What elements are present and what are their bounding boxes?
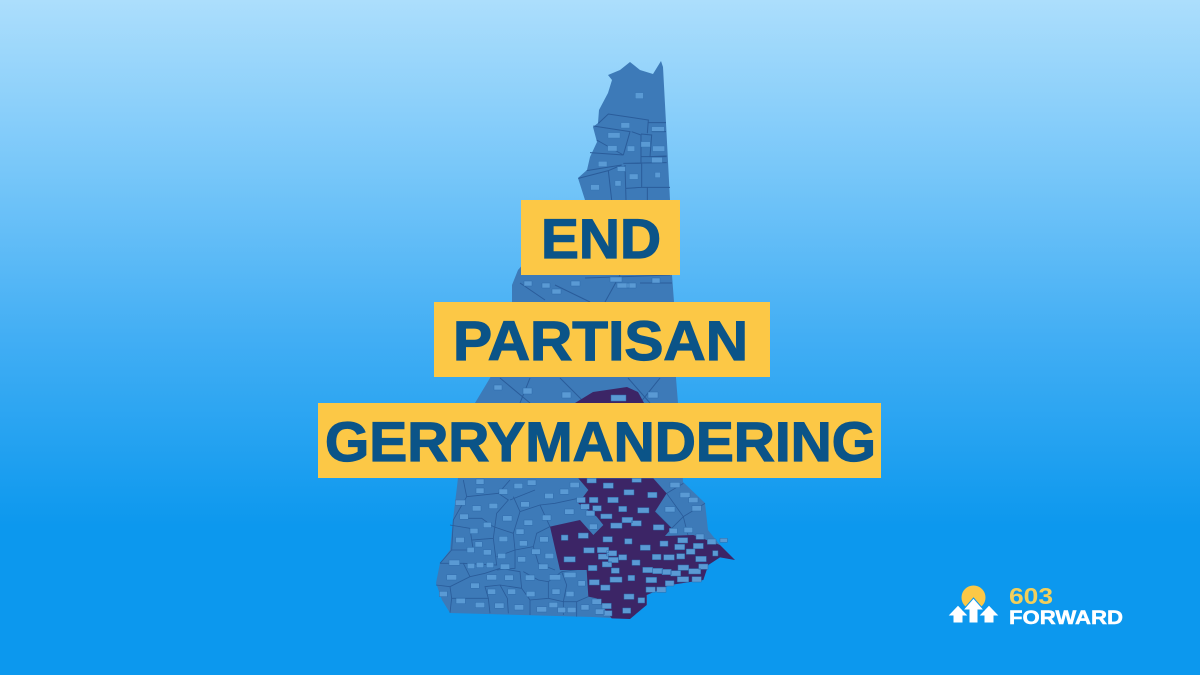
- state outline: [436, 61, 735, 619]
- banner: END: END: [541, 207, 661, 270]
- purple district fragment between banners: [575, 387, 644, 403]
- banner: PARTISAN: PARTISAN: [453, 309, 748, 372]
- purple district: [550, 478, 735, 619]
- banner: END: [521, 200, 680, 275]
- map: New Hampshire districts: [436, 61, 735, 619]
- central county borders and labels: [494, 275, 672, 403]
- logo: 603 Forward: [948, 583, 1123, 629]
- logo text: FORWARD: FORWARD: [1009, 608, 1123, 629]
- banner: GERRYMANDERING: GERRYMANDERING: [325, 410, 876, 473]
- north county borders and labels: [578, 93, 670, 200]
- south county borders, and labels on blue districts: [436, 478, 735, 619]
- icon: three arrows: [948, 598, 1000, 623]
- icon: sun: [962, 586, 986, 610]
- logo text: 603: 603: [1009, 583, 1053, 609]
